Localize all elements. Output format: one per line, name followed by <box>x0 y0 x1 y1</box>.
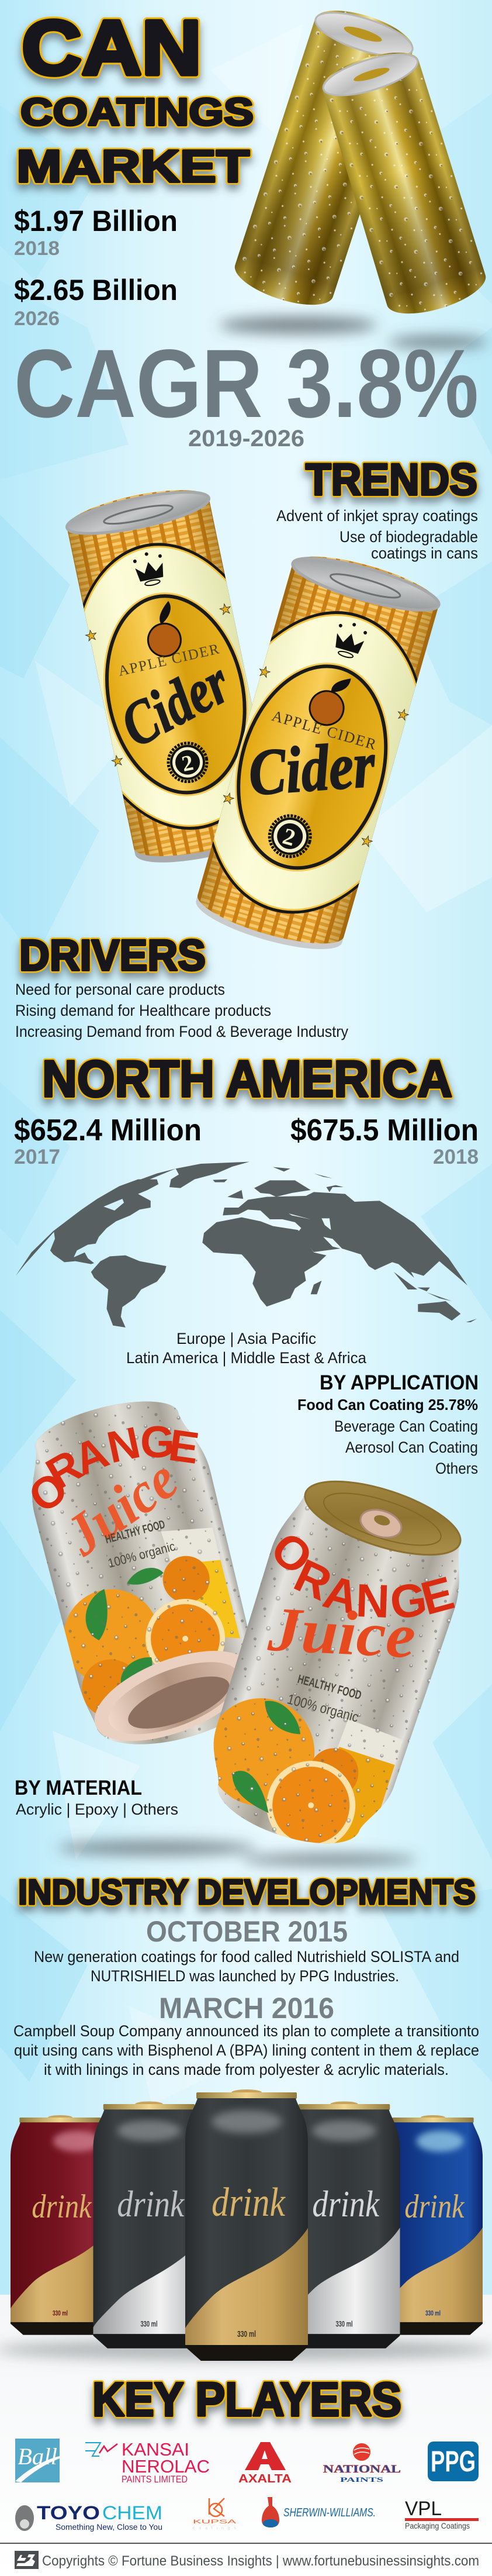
stat: 2018 market size <box>14 205 178 260</box>
logo: Ball <box>15 2439 60 2482</box>
stat: North America 2018: 2018 <box>433 1146 479 1168</box>
illustration: orange juice can right: 100% organic <box>286 1691 360 1726</box>
logo: Toyochem: CHEM <box>102 2502 162 2523</box>
shadow under gold cans <box>219 316 488 349</box>
illustration: cider can back: 2 <box>179 750 196 777</box>
illustration: drink can centre: 330 ml <box>237 2329 256 2339</box>
by material list: Acrylic | Epoxy | Others <box>16 1801 178 1818</box>
illustration: cider can back: ★ <box>110 752 125 770</box>
illustration: drink can blue: 330 ml <box>425 2309 441 2318</box>
illustration: cider can back: ★ <box>84 627 99 645</box>
logo: Kupsa Coatings: KUPSA <box>193 2519 236 2525</box>
illustration: drink can red <box>11 2115 110 2336</box>
heading: DRIVERS: DRIVERS <box>19 931 206 980</box>
logo: Toyochem: TOYO <box>37 2502 100 2523</box>
trends list: Advent of inkjet spray coatings <box>276 507 478 525</box>
logo: VPL Packaging Coatings: VPL <box>405 2498 442 2520</box>
shadow under orange juice cans <box>57 1840 417 1866</box>
logo: Kupsa Coatings: coatings <box>193 2526 236 2530</box>
illustration: drink can grey right <box>288 2101 400 2350</box>
heading: INDUSTRY DEVELOPMENTS: INDUSTRY DEVELOPMENTS <box>18 1872 476 1912</box>
by application list: Aerosol Can Coating <box>345 1439 478 1456</box>
illustration: drink can grey left: 330 ml <box>140 2319 158 2328</box>
CAGR figure: 2019-2026 <box>188 426 304 451</box>
illustration: orange juice can left: 100% organic <box>106 1539 176 1571</box>
trends list: coatings in cans <box>371 544 478 562</box>
title line: MARKET: MARKET <box>16 140 250 192</box>
drivers list: Rising demand for Healthcare products <box>15 1002 271 1019</box>
logo: National Paints: NATIONAL <box>323 2463 401 2475</box>
world map <box>16 1162 477 1327</box>
illustration: orange juice can right: HEALTHY FOOD <box>296 1672 363 1702</box>
by application list: Beverage Can Coating <box>334 1418 478 1435</box>
illustration: cider can front: 2 <box>280 823 299 851</box>
heading: KEY PLAYERS: KEY PLAYERS <box>92 2373 401 2426</box>
illustration: orange juice can right: Juice <box>266 1594 417 1672</box>
by application list <box>297 1371 479 1477</box>
logo: Kansai Nerolac: PAINTS LIMITED <box>122 2474 188 2485</box>
logo: Sherwin-Williams <box>262 2497 376 2527</box>
development: March 2016: MARCH 2016 <box>159 1992 334 2025</box>
illustration: orange juice can left: ORANGE <box>20 1418 202 1523</box>
logo: VPL Packaging Coatings <box>405 2498 479 2530</box>
logo: PPG <box>428 2441 479 2481</box>
illustration: orange juice can right: ORANGE <box>261 1522 459 1629</box>
other regions: Latin America | Middle East & Africa <box>126 1349 367 1367</box>
logo: Sherwin-Williams: SHERWIN-WILLIAMS. <box>283 2506 376 2519</box>
illustration: cider can front: ★ <box>256 663 273 681</box>
logo: PPG: PPG <box>431 2445 476 2478</box>
other regions: Europe | Asia Pacific <box>176 1330 316 1347</box>
illustration: orange juice can right <box>214 1481 462 1843</box>
illustration: cider can front <box>196 557 441 949</box>
stat: 2018 market size: $1.97 Billion <box>14 205 178 237</box>
illustration: cider can front: APPLE CIDER <box>270 707 379 753</box>
stat: 2018 market size: 2018 <box>14 237 60 260</box>
illustration: drink can red: 330 ml <box>53 2309 68 2318</box>
logo: Ball: Ball <box>18 2443 57 2470</box>
stat: 2026 market size <box>14 274 178 330</box>
illustration: cider can back: APPLE CIDER <box>117 641 221 680</box>
illustration: orange juice can left: Juice <box>53 1446 189 1568</box>
heading: TRENDS: TRENDS <box>306 455 477 505</box>
illustration: drink can red: drink <box>32 2188 92 2225</box>
logo: National Paints: PAINTS <box>340 2475 384 2484</box>
illustration: drink can centre: drink <box>212 2180 286 2225</box>
logo: Kansai Nerolac <box>85 2439 210 2485</box>
by application list: Others <box>435 1460 478 1477</box>
illustration: cider can back <box>65 490 252 863</box>
title line: COATINGS: COATINGS <box>20 90 254 133</box>
illustration: drink can grey right: 330 ml <box>335 2319 353 2328</box>
by material list <box>15 1777 178 1818</box>
stat: 2026 market size: $2.65 Billion <box>14 274 178 306</box>
illustration: cider can back: ★ <box>217 601 233 619</box>
logo: Toyochem <box>15 2502 162 2532</box>
illustration: cider can front: ★ <box>358 832 375 851</box>
development: October 2015: New generation coatings for food called Nutrishield SOLISTA and <box>34 1948 459 1965</box>
stat: North America 2017: 2017 <box>14 1146 60 1168</box>
title <box>16 5 254 192</box>
heading: NORTH AMERICA: NORTH AMERICA <box>42 1050 452 1108</box>
floor shadow under drink cans <box>0 2339 492 2360</box>
drivers list: Increasing Demand from Food & Beverage Industry <box>15 1023 348 1040</box>
illustration: drink can grey right: drink <box>312 2183 380 2225</box>
heading: DRIVERS: DRIVERS <box>19 931 206 980</box>
illustration: cider can back: Cider <box>110 647 241 760</box>
drivers list: Need for personal care products <box>15 981 225 998</box>
development: October 2015: NUTRISHIELD was launched by PPG Industries. <box>91 1967 399 1985</box>
by material list: BY MATERIAL <box>15 1777 142 1799</box>
heading: INDUSTRY DEVELOPMENTS: INDUSTRY DEVELOPMENTS <box>18 1872 476 1912</box>
illustration: cider can front: ★ <box>395 706 411 725</box>
logo: Kupsa Coatings <box>193 2498 236 2530</box>
title line: COATINGS: COATINGS <box>20 90 254 133</box>
by application list: Food Can Coating 25.78% <box>297 1396 478 1413</box>
illustration: orange juice can left <box>32 1401 248 1744</box>
logo: Kansai Nerolac: NEROLAC <box>122 2456 210 2477</box>
illustration: drink can centre <box>185 2089 308 2363</box>
illustration: cider can front: ★ <box>220 789 237 808</box>
logo: Axalta <box>238 2442 292 2485</box>
development: March 2016: it with linings in cans made from polyester & acrylic materials. <box>44 2061 449 2078</box>
stat: North America 2017: $652.4 Million <box>14 1113 202 1147</box>
illustration: cider can front: Cider <box>247 728 378 809</box>
illustration: drink can blue <box>383 2115 483 2336</box>
stat: 2026 market size: 2026 <box>14 308 60 330</box>
logo: Toyochem: Something New, Close to You <box>56 2522 162 2532</box>
other regions <box>126 1330 367 1367</box>
heading: TRENDS: TRENDS <box>306 455 477 505</box>
logo: National Paints <box>323 2443 401 2484</box>
logo: VPL Packaging Coatings: Packaging Coatings <box>405 2521 470 2530</box>
drivers list <box>15 981 348 1040</box>
illustration: orange juice can left: HEALTHY FOOD <box>104 1518 167 1546</box>
stat: North America 2018: $675.5 Million <box>290 1113 479 1147</box>
heading: NORTH AMERICA: NORTH AMERICA <box>42 1050 452 1108</box>
development: March 2016 <box>13 1992 479 2078</box>
heading: KEY PLAYERS: KEY PLAYERS <box>92 2373 401 2426</box>
title line: MARKET: MARKET <box>16 140 250 192</box>
icon: Fortune Business Insights logo <box>15 2551 39 2569</box>
illustration: drink can blue: drink <box>404 2188 465 2225</box>
illustration: gold cans <box>230 1 491 323</box>
illustration: drink can grey left <box>93 2101 205 2350</box>
title line: CAN: CAN <box>22 5 202 91</box>
trends list: Use of biodegradable <box>339 528 478 546</box>
development: October 2015 <box>34 1915 459 1985</box>
trends list <box>276 507 478 562</box>
development: October 2015: OCTOBER 2015 <box>146 1915 348 1948</box>
logo: Kansai Nerolac: KANSAI <box>122 2439 189 2460</box>
title line: CAN: CAN <box>22 5 202 91</box>
logo: Axalta: AXALTA <box>238 2472 292 2485</box>
illustration: drink can grey left: drink <box>117 2183 185 2225</box>
stat: North America 2017 <box>14 1113 202 1168</box>
stat: North America 2018 <box>290 1113 479 1168</box>
by application list: BY APPLICATION <box>320 1371 479 1394</box>
